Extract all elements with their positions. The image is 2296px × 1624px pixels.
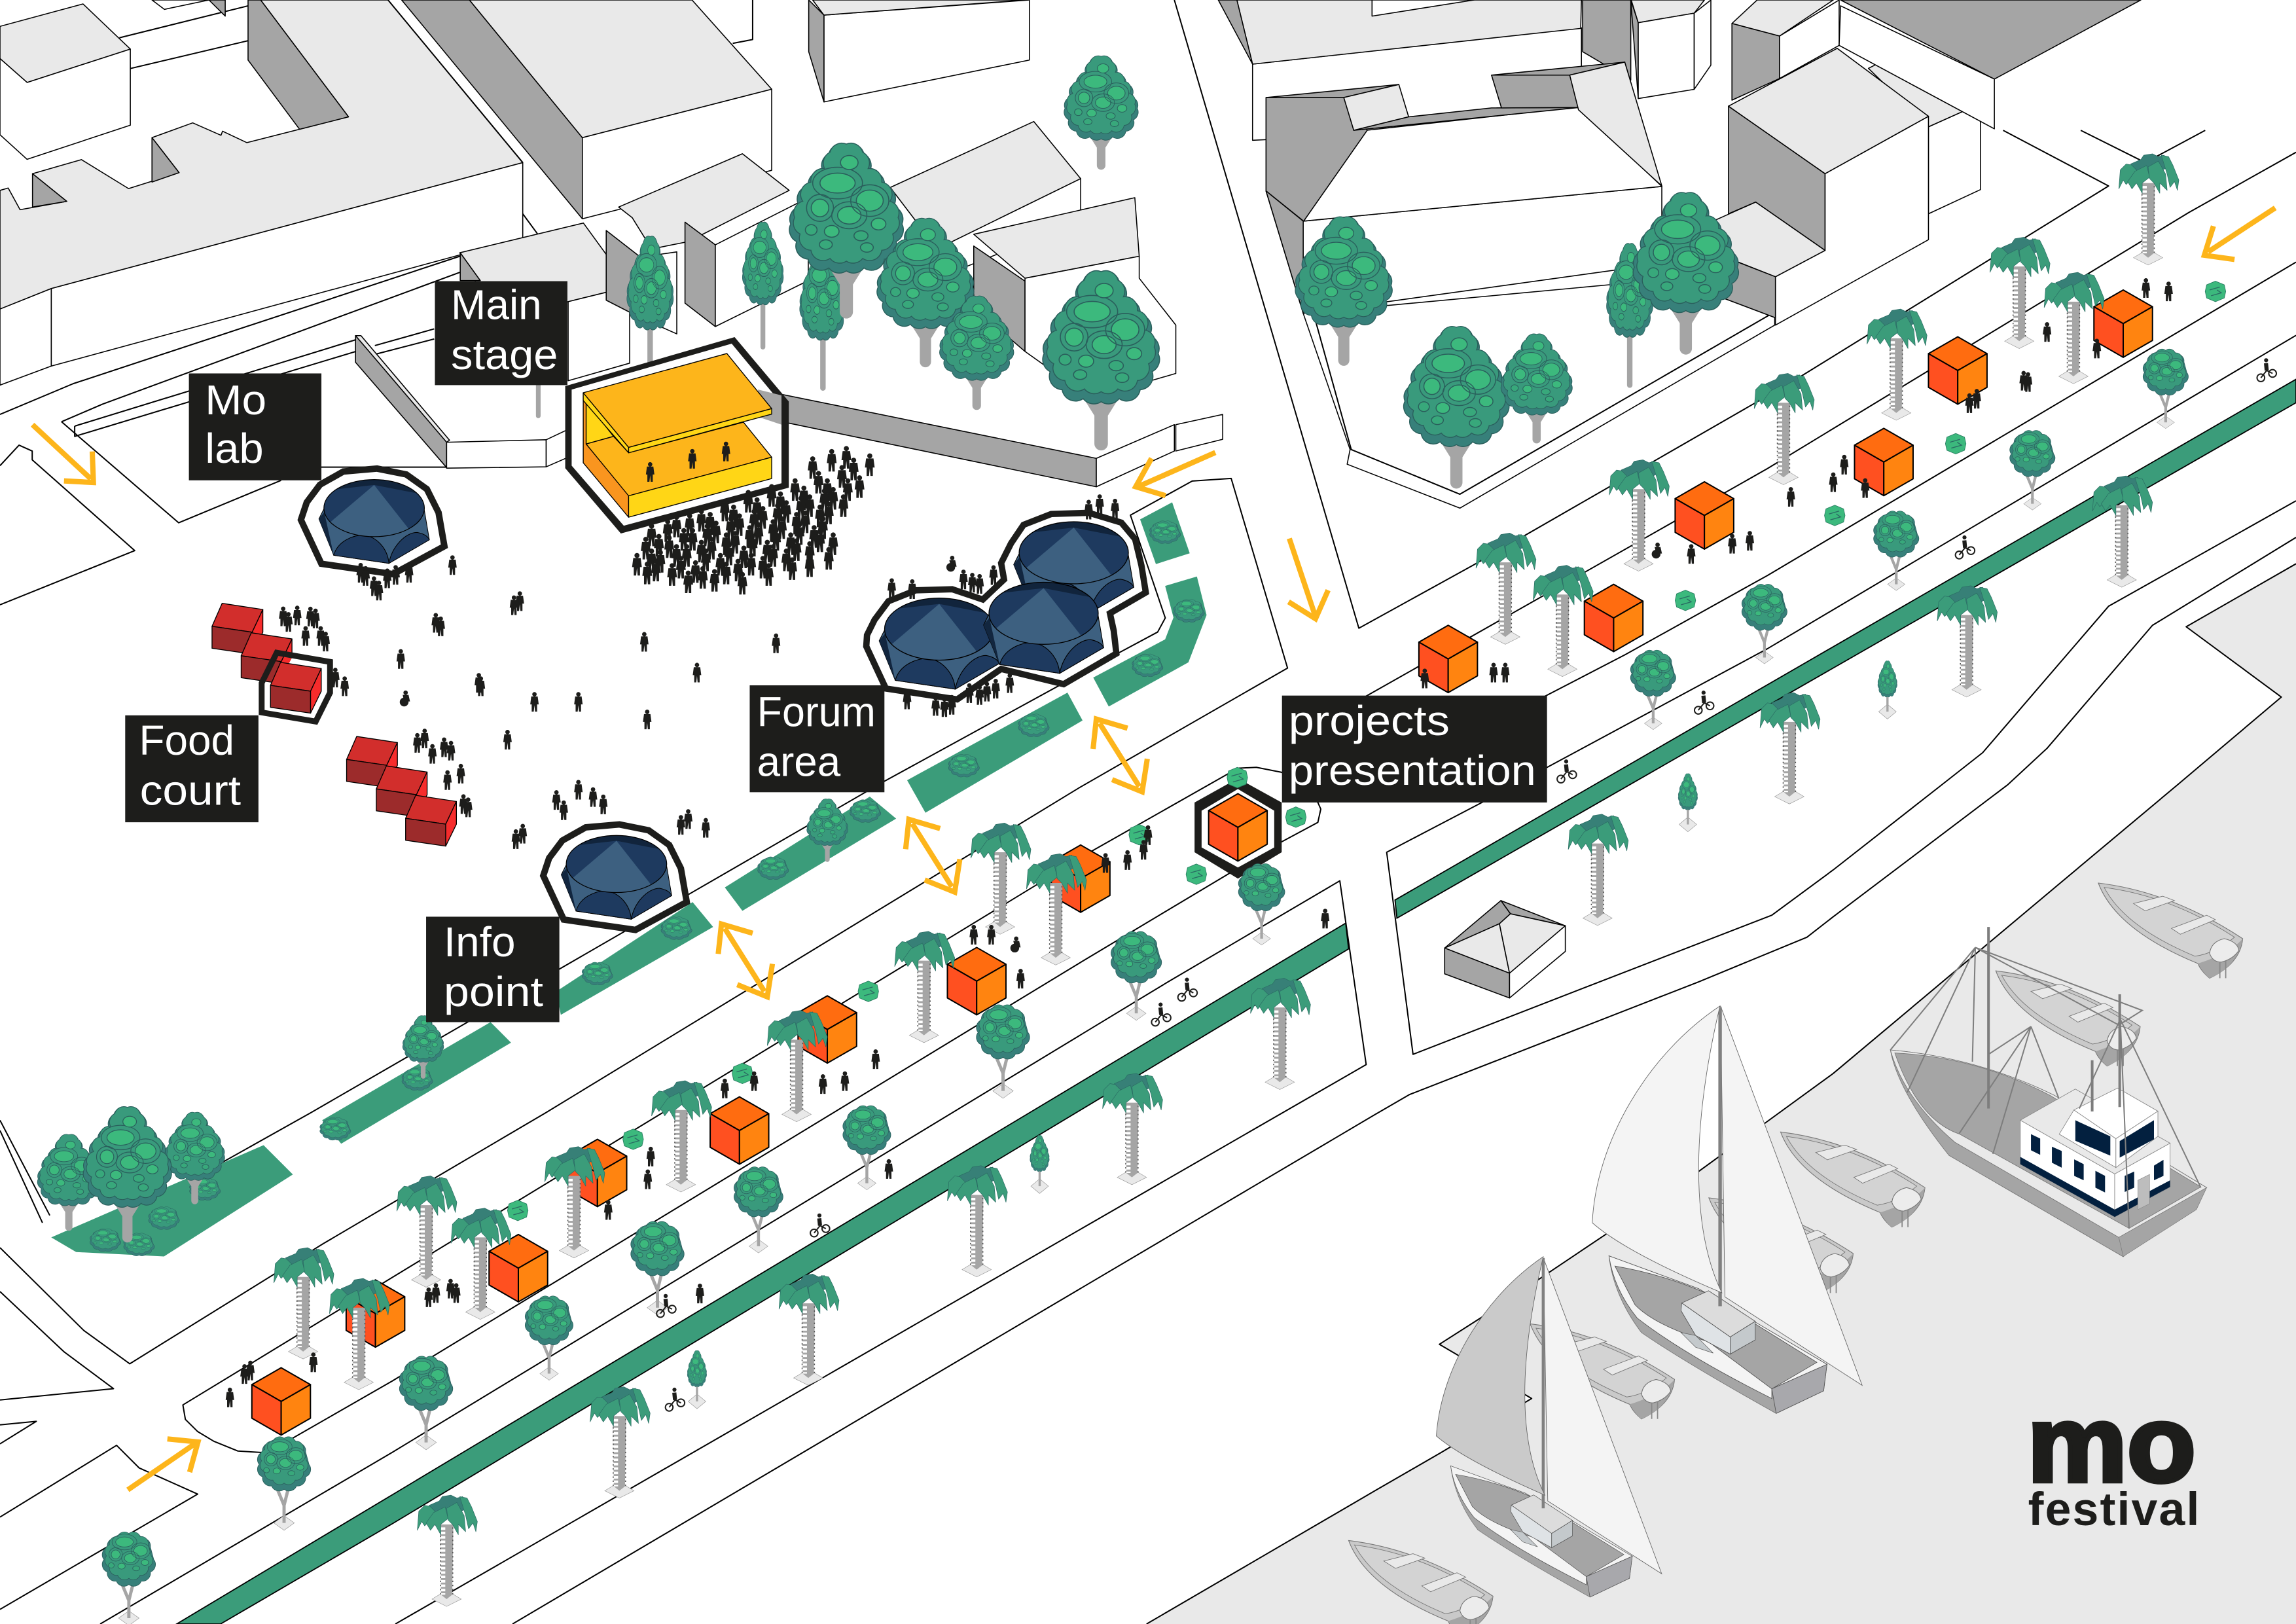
double arrow two xyxy=(906,820,960,892)
label: Info point: point xyxy=(444,968,543,1015)
green flower beds xyxy=(51,502,1206,1256)
label: Forum area xyxy=(749,685,884,792)
label: Info point: Info xyxy=(444,918,516,965)
label: Info point xyxy=(426,916,560,1022)
crowd xyxy=(632,446,874,594)
small cypress on promenade xyxy=(687,660,1897,1409)
quay edge xyxy=(1147,564,2296,1624)
sailboat small xyxy=(1437,1257,1662,1597)
label: Mo lab xyxy=(189,373,321,480)
dinghies xyxy=(1349,883,2243,1624)
projects presentation highlighted cube xyxy=(1194,778,1282,878)
label: Food court: Food xyxy=(139,717,234,764)
palm trees xyxy=(274,154,2179,1606)
buildings top-left xyxy=(0,0,1176,399)
tree trunk below Main stage label xyxy=(537,381,539,416)
label: Mo lab: Mo xyxy=(205,376,266,424)
visitors on plaza xyxy=(279,494,1119,849)
fishing boat xyxy=(1890,927,2207,1257)
pedestrians and cyclists on promenades xyxy=(226,278,2276,1411)
label: projects presentation: projects xyxy=(1289,697,1450,744)
label: Main stage: Main xyxy=(451,281,542,329)
info point tent xyxy=(543,825,687,930)
double arrow three xyxy=(718,924,772,997)
label: Mo lab: lab xyxy=(205,425,264,472)
logo: mo festival: festival xyxy=(2028,1483,2199,1536)
buildings top-right xyxy=(1218,0,2141,508)
logo: mo festival: mo xyxy=(2027,1384,2196,1505)
arrow: entrance upper left xyxy=(33,425,94,482)
label: Main stage: stage xyxy=(451,331,558,378)
retaining walls xyxy=(355,336,1223,487)
label: projects presentation: presentation xyxy=(1289,747,1536,794)
green strip right xyxy=(1395,379,2296,918)
large trees xyxy=(37,56,1738,1237)
double arrow one xyxy=(1093,719,1147,792)
arrow: towards forum area xyxy=(1136,452,1215,496)
label: Main stage xyxy=(435,281,567,385)
mo lab tent xyxy=(301,469,444,574)
main stage highlight and stage xyxy=(565,337,789,533)
sailboat large xyxy=(1592,1006,1862,1413)
arrow: entrance lower left xyxy=(128,1439,198,1490)
small green planters xyxy=(507,281,2226,1221)
label: Forum area: area xyxy=(757,738,841,785)
label: Food court: court xyxy=(140,767,241,814)
forum area tents xyxy=(867,513,1146,699)
bushes on beds xyxy=(90,521,1204,1256)
water xyxy=(1147,564,2296,1624)
orange exhibition cubes xyxy=(252,290,2153,1435)
label: projects presentation xyxy=(1282,696,1547,803)
arrow: entrance upper right xyxy=(2204,208,2275,259)
hut xyxy=(1444,901,1566,998)
promenade trees xyxy=(102,349,2188,1624)
arrow: street entrance xyxy=(1289,539,1328,619)
food stalls xyxy=(212,604,456,846)
label: Food court xyxy=(125,715,259,822)
green strip lower xyxy=(177,923,1349,1624)
cypress trees xyxy=(627,222,1653,388)
label: Forum area: Forum xyxy=(757,689,876,736)
